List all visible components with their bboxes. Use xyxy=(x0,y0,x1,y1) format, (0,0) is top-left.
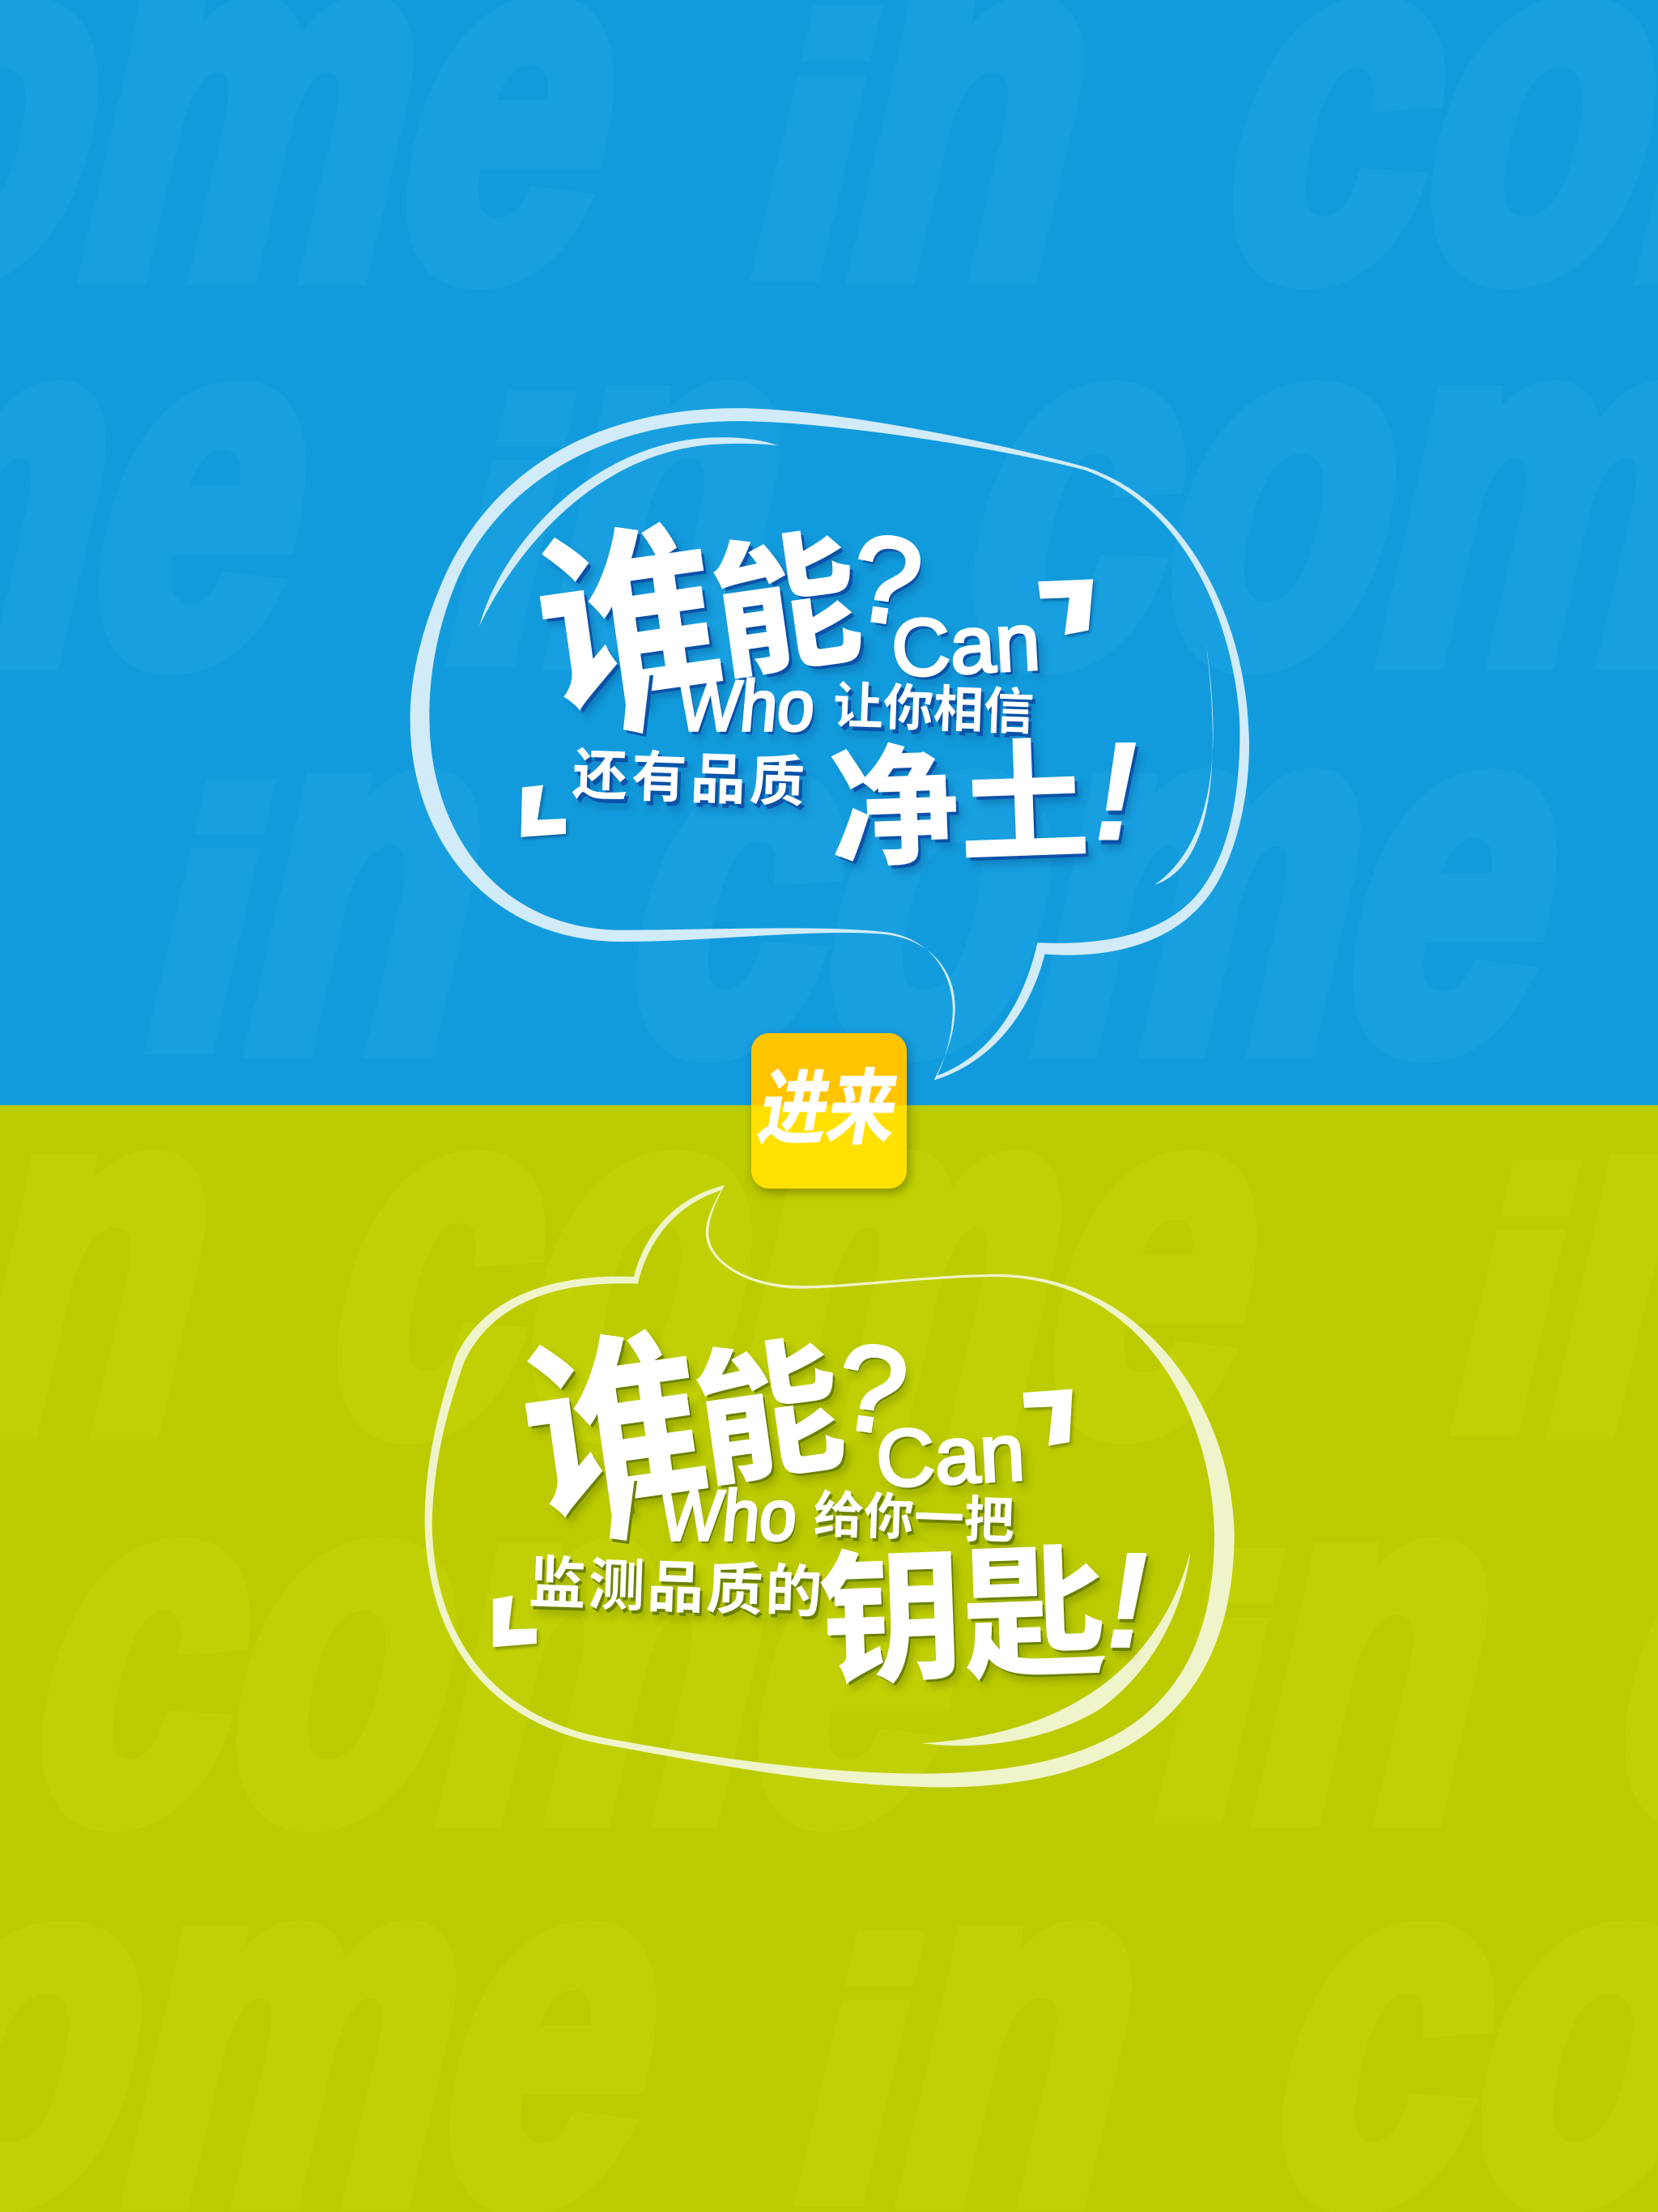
background watermark row 5: come xyxy=(0,1372,1028,1917)
speech bubble outline xyxy=(410,408,1249,1080)
background watermark row 5: n xyxy=(1214,1372,1558,1917)
long stroke of headline character xyxy=(623,675,653,737)
background watermark row 2 xyxy=(0,215,1658,760)
background watermark row 5: i xyxy=(1124,1495,1313,1888)
background watermark row 2: i xyxy=(415,338,605,731)
background watermark row 5 xyxy=(0,1372,1658,1917)
panel: green lower background xyxy=(0,1105,1658,2212)
headline 能: 能 xyxy=(703,517,869,699)
headline 钥匙: 钥匙 xyxy=(818,1534,1107,1702)
exclamation mark: ! xyxy=(1080,713,1154,871)
headline 净土: 净土 xyxy=(827,729,1091,883)
corner bracket bottom left xyxy=(493,1596,537,1647)
question mark: ? xyxy=(829,1317,915,1461)
background watermark row 2: n xyxy=(506,215,849,760)
corner bracket bottom left xyxy=(521,785,566,837)
headline 能: 能 xyxy=(686,1324,852,1506)
subtitle 给你一把: 给你一把 xyxy=(813,1487,1015,1550)
question mark: ? xyxy=(844,508,929,652)
background watermark row 4 xyxy=(0,985,1658,1529)
exclamation mark: ! xyxy=(1092,1524,1165,1678)
long stroke of headline character xyxy=(610,1481,637,1544)
headline 谁: 谁 xyxy=(525,504,733,740)
subtitle 还有品质: 还有品质 xyxy=(572,744,810,814)
panel: blue upper background xyxy=(0,0,1658,1105)
word Who: Who xyxy=(675,666,818,746)
subtitle 监测品质的: 监测品质的 xyxy=(528,1551,826,1624)
corner bracket top right xyxy=(1023,1389,1073,1446)
background watermark row 1 xyxy=(0,0,1658,375)
panel: blue speech bubble xyxy=(410,408,1249,1080)
subtitle 让你相信: 让你相信 xyxy=(832,678,1035,741)
logo wordmark 进来: 进来 xyxy=(753,1063,905,1154)
headline 谁: 谁 xyxy=(510,1311,719,1547)
icon: yellow app logo xyxy=(751,1033,907,1189)
speech bubble outline xyxy=(425,1185,1235,1788)
word Who: Who xyxy=(657,1475,801,1555)
background watermark row 3 xyxy=(114,603,1658,1148)
word Can: Can xyxy=(874,1406,1027,1505)
word Can: Can xyxy=(889,596,1043,695)
background watermark row 6 xyxy=(0,1755,1658,2212)
background watermark row 4: i xyxy=(1420,1107,1609,1500)
panel: green speech bubble xyxy=(424,1185,1235,1788)
corner bracket top right xyxy=(1038,579,1093,635)
